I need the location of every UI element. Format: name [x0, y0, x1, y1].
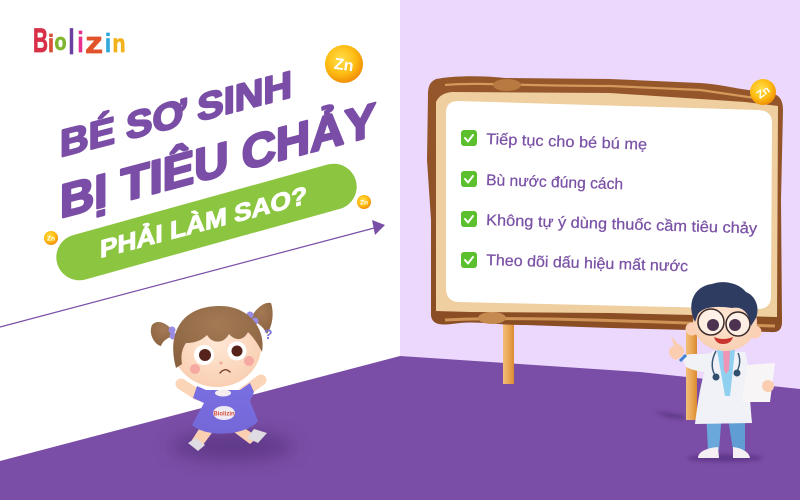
legs	[188, 426, 267, 451]
dress	[192, 383, 258, 434]
glasses	[698, 309, 750, 336]
large Zn ball: Zn	[333, 56, 355, 75]
logo: Biolizin: B	[33, 22, 48, 60]
arrow	[0, 220, 385, 327]
Zn ball on sign: Zn	[755, 84, 773, 102]
shirt	[717, 350, 735, 396]
pointing arm	[682, 352, 714, 372]
girl character: Biolizin	[213, 412, 235, 418]
girl character	[151, 303, 294, 460]
logo: Biolizin: z	[85, 25, 103, 60]
checklist item 2: Bù nước đúng cách	[486, 172, 623, 193]
large Zn ball	[325, 45, 363, 83]
clipboard	[742, 363, 775, 402]
logo: Biolizin	[33, 22, 126, 62]
mouth	[714, 337, 733, 344]
right pigtail	[250, 303, 273, 334]
cream frame	[436, 92, 778, 317]
cheeks	[190, 364, 200, 374]
left pigtail	[151, 322, 176, 346]
nose and mouth	[220, 362, 222, 364]
shoes	[698, 447, 719, 458]
background: white left side	[0, 0, 400, 500]
wooden sign	[427, 76, 783, 332]
small Zn ball left: Zn	[47, 236, 55, 242]
wood grain bottom	[445, 319, 775, 326]
checklist item 1: Tiếp tục cho bé bú mẹ	[486, 131, 647, 154]
checklist item 3: Không tự ý dùng thuốc cầm tiêu chảy	[486, 212, 758, 238]
wood grain top	[445, 84, 755, 98]
small Zn ball right: Zn	[360, 200, 368, 206]
stethoscope	[712, 351, 740, 376]
collar	[215, 390, 231, 396]
small Zn ball right	[357, 195, 371, 209]
hair ties	[168, 312, 258, 340]
white board panel	[446, 101, 772, 309]
hair	[173, 306, 263, 368]
checklist item 4: Theo dõi dấu hiệu mất nước	[486, 252, 689, 275]
logo: Biolizin: o	[54, 29, 66, 56]
arms	[181, 384, 198, 395]
head	[693, 293, 757, 351]
eyes	[194, 345, 214, 365]
green pill with subtitle	[51, 158, 362, 286]
left sign post	[503, 318, 514, 384]
post shadow	[652, 411, 685, 419]
small Zn ball left	[44, 231, 58, 245]
title line 2: BỊ TIÊU CHẢY	[60, 92, 376, 229]
green pill with subtitle: PHẢI LÀM SAO?	[100, 180, 307, 264]
ears	[686, 322, 698, 336]
logo: Biolizin: i	[78, 27, 84, 59]
background: lilac right side	[400, 0, 800, 500]
logo: Biolizin: i	[48, 30, 54, 58]
blue cuff	[680, 355, 686, 361]
Zn ball on sign	[750, 79, 776, 105]
trousers	[706, 412, 722, 450]
pointing hand	[669, 336, 684, 360]
logo: Biolizin: i	[105, 28, 111, 58]
tie	[723, 351, 730, 374]
lab coat	[695, 351, 752, 424]
eyes	[707, 319, 719, 331]
doctor character	[669, 282, 775, 462]
hair	[691, 282, 758, 326]
purple floor	[0, 356, 800, 500]
dress logo	[213, 406, 235, 420]
question mark: ?	[264, 326, 273, 342]
holding hand	[762, 380, 774, 392]
head	[173, 307, 261, 387]
title line 1: BÉ SƠ SINH	[60, 63, 292, 166]
logo: Biolizin: n	[112, 30, 126, 58]
right sign post	[686, 325, 697, 420]
logo: Biolizin: l	[68, 23, 74, 62]
